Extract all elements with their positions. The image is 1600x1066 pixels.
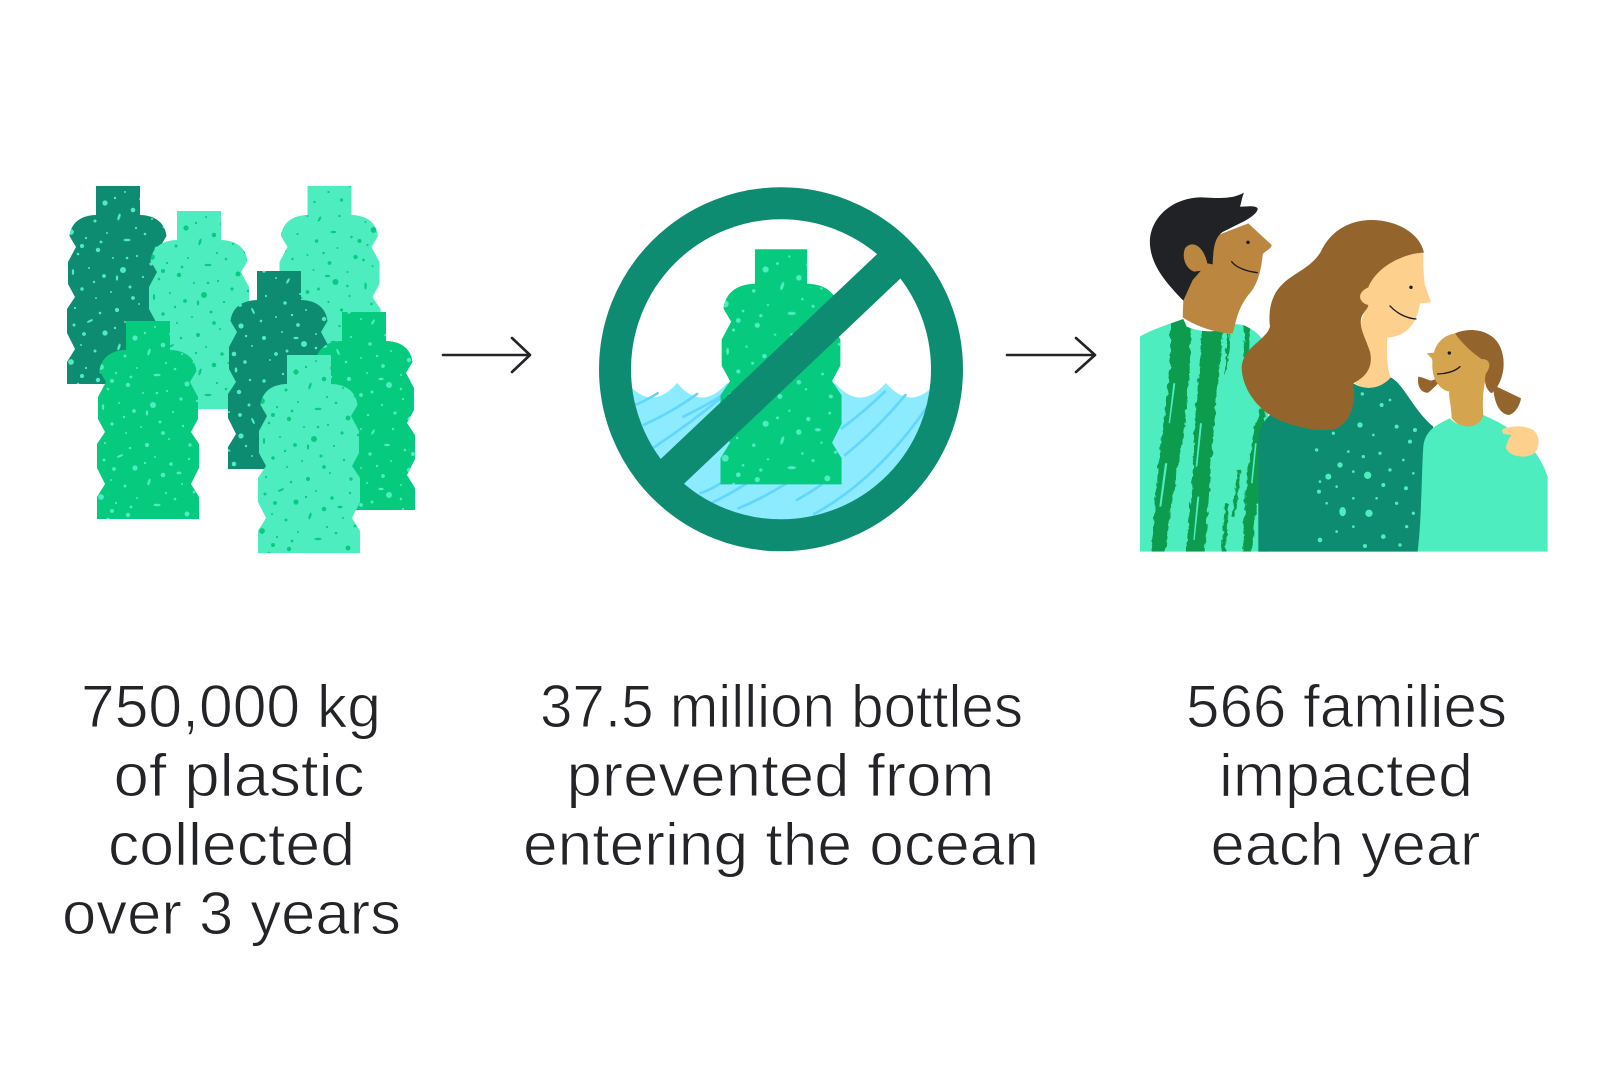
- text block: plastic collected: 750,000 kg: [81, 673, 381, 740]
- panel: plastic bottles illustration: [67, 186, 415, 553]
- icon: light bottle top right: [278, 186, 380, 384]
- arrow: bottles to prohibition sign: [443, 338, 530, 372]
- panel: no bottles in the ocean sign: [577, 203, 985, 560]
- icon: dark bottle top left: [67, 186, 169, 384]
- woman: [1242, 220, 1433, 552]
- arrow: prohibition sign to family: [1007, 338, 1095, 372]
- icon: prohibition bar: [650, 244, 911, 493]
- text block: bottles prevented: entering the ocean: [523, 811, 1039, 878]
- text block: families impacted: [1186, 673, 1507, 878]
- text block: bottles prevented: [523, 673, 1039, 878]
- icon: light bottle bottom centre: [258, 355, 360, 553]
- text block: plastic collected: collected: [108, 811, 355, 878]
- icon: green bottle bottom left: [97, 321, 199, 519]
- text block: bottles prevented: prevented from: [566, 742, 994, 809]
- text block: families impacted: 566 families: [1186, 673, 1507, 740]
- icon: bottle in water: [720, 249, 842, 484]
- text block: plastic collected: [62, 673, 401, 947]
- text block: families impacted: each year: [1210, 811, 1480, 878]
- icon: prohibition ring: [615, 203, 947, 535]
- ocean water: [632, 383, 930, 520]
- text block: plastic collected: of plastic: [114, 742, 364, 809]
- man: [1140, 193, 1272, 560]
- text block: plastic collected: over 3 years: [62, 880, 401, 947]
- text block: families impacted: impacted: [1219, 742, 1473, 809]
- icon: light bottle centre left: [148, 211, 250, 409]
- icon: dark bottle centre: [228, 271, 330, 469]
- icon: green bottle right: [313, 312, 415, 510]
- panel: family illustration: [1140, 193, 1548, 560]
- girl: [1418, 330, 1548, 552]
- text block: bottles prevented: 37.5 million bottles: [540, 673, 1023, 740]
